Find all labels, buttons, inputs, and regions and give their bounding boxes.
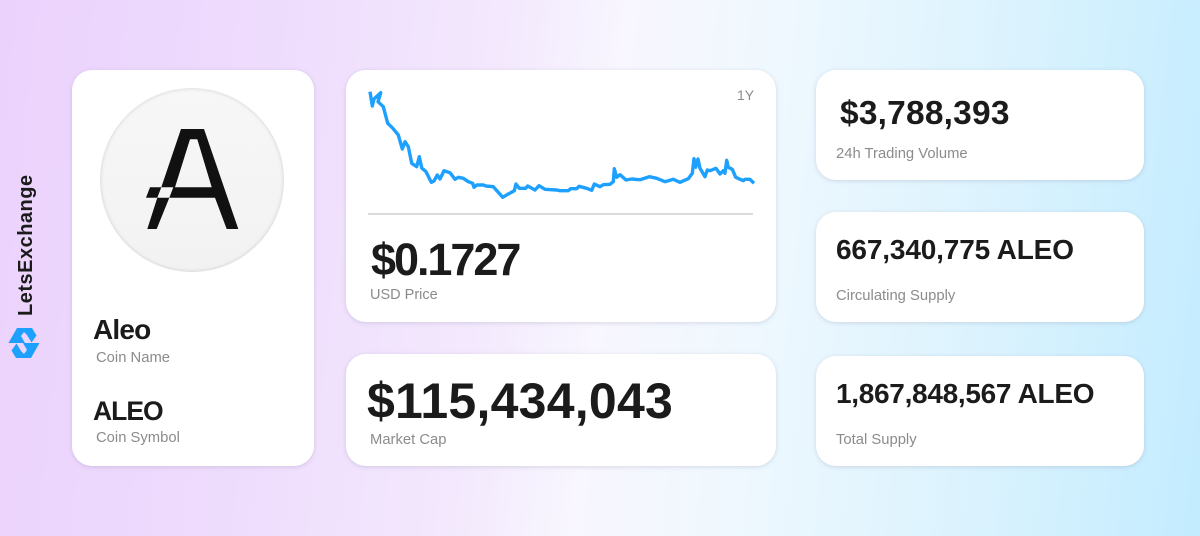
coin name label: Coin Name <box>96 350 170 366</box>
total label: Total Supply <box>836 432 917 448</box>
coin symbol label: Coin Symbol <box>96 430 180 446</box>
circulating value: 667,340,775 ALEO <box>836 234 1074 265</box>
panel: circulating supply <box>816 212 1144 322</box>
coin logo disc <box>100 88 284 272</box>
price label: USD Price <box>370 287 438 303</box>
volume label: 24h Trading Volume <box>836 146 968 162</box>
brand logo: LetsExchange <box>8 174 40 358</box>
line chart: 1Y price <box>368 90 756 215</box>
icon: Aleo A mark <box>146 129 238 229</box>
coin symbol: ALEO <box>93 396 163 426</box>
circulating label: Circulating Supply <box>836 288 955 304</box>
panel: total supply <box>816 356 1144 466</box>
panel: coin identity <box>72 70 314 466</box>
panel: price chart <box>346 70 776 322</box>
coin name: Aleo <box>93 314 150 345</box>
panel: market cap <box>346 354 776 466</box>
icon: exchange arrows <box>8 328 40 358</box>
total value: 1,867,848,567 ALEO <box>836 378 1094 409</box>
volume value: $3,788,393 <box>840 95 1010 132</box>
period label: 1Y <box>737 87 754 103</box>
brand wordmark: LetsExchange <box>15 174 37 316</box>
panel: trading volume <box>816 70 1144 180</box>
price value: $0.1727 <box>371 234 519 285</box>
market cap label: Market Cap <box>370 432 446 448</box>
market cap value: $115,434,043 <box>367 373 673 429</box>
